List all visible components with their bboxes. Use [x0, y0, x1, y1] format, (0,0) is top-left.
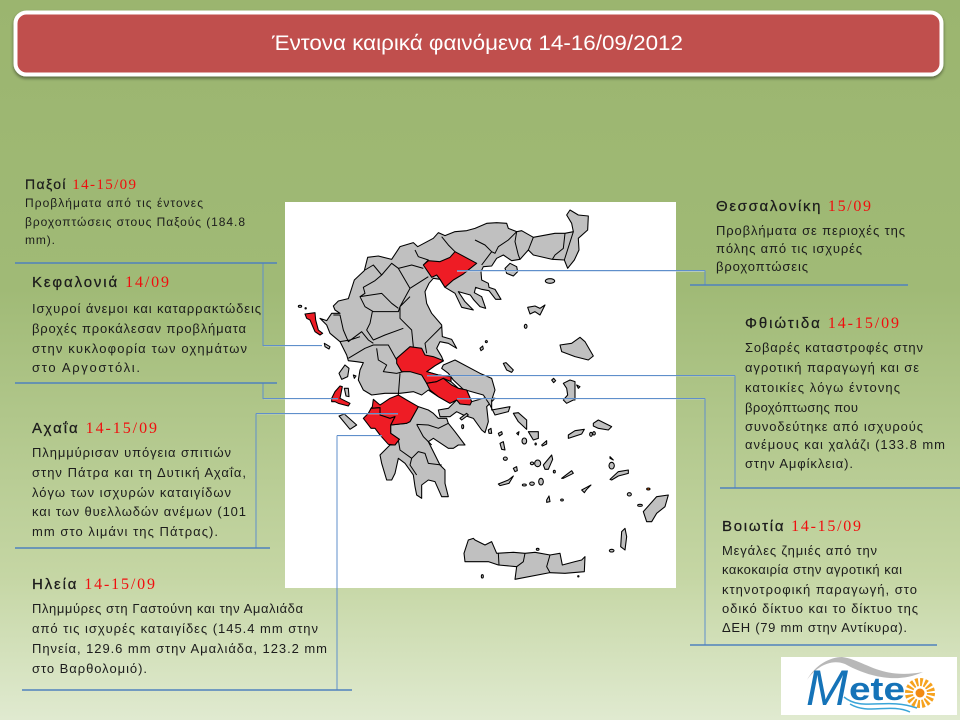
text: Ilia: Πηνεία, 129.6 mm στην Αμαλιάδα, 123.2 mm — [32, 641, 327, 656]
text: Fthiotida: ανέμους και χαλάζι (133.8 mm — [745, 437, 945, 452]
text: Ilia: από τις ισχυρές καταιγίδες (145.4 mm στην — [32, 621, 318, 636]
text: Fthiotida: βροχόπτωσης που — [745, 400, 858, 415]
logo: Meteo: ete — [849, 671, 905, 707]
connector lines — [15, 263, 960, 690]
panel: Ilia — [32, 576, 327, 676]
northern and central mainland — [320, 210, 588, 433]
region: Ilia — [363, 408, 399, 445]
text: Ilia: Πλημμύρες στη Γαστούνη και την Αμαλιάδα — [32, 601, 303, 616]
text: Achaia: και των θυελλωδών ανέμων (101 — [32, 504, 246, 519]
heading: Fthiotida: Φθιώτιδα 14-15/09 — [745, 315, 899, 332]
text: Achaia: Πλημμύρισαν υπόγεια σπιτιών — [32, 445, 231, 460]
text: Paxoi: Προβλήματα από τις έντονες — [25, 196, 203, 210]
icon: sun — [909, 682, 931, 704]
region: Thessaloniki — [423, 252, 477, 287]
text: Fthiotida: αγροτική παραγωγή και σε — [745, 360, 919, 375]
Crete — [464, 538, 585, 579]
region: Paxoi — [305, 313, 323, 335]
text: Voiotia: ΔΕΗ (79 mm στην Αντίκυρα). — [722, 620, 907, 635]
text: Thessaloniki: πόλης από τις ισχυρές — [716, 241, 862, 256]
text: Fthiotida: στην Αμφίκλεια). — [745, 456, 853, 471]
panel: Thessaloniki — [716, 198, 905, 274]
Peloponnese — [380, 407, 465, 498]
heading: Kefalonia: Κεφαλονιά 14/09 — [32, 274, 169, 291]
text: Voiotia — [722, 543, 918, 635]
text: Voiotia: οδικό δίκτυο και το δίκτυο της — [722, 601, 918, 616]
region: Achaia — [371, 395, 418, 425]
text: Thessaloniki: Προβλήματα σε περιοχές της — [716, 223, 905, 238]
text: Thessaloniki: βροχοπτώσεις — [716, 259, 808, 274]
text: Achaia — [32, 445, 246, 539]
logo: Meteo — [781, 657, 957, 716]
regional borders — [333, 232, 573, 395]
title banner — [16, 12, 942, 74]
panel: Fthiotida — [745, 315, 945, 471]
panel: Paxoi — [25, 176, 245, 247]
text: Thessaloniki — [716, 223, 905, 274]
heading: Thessaloniki: Θεσσαλονίκη 15/09 — [716, 198, 871, 215]
text: Achaia: στην Πάτρα και τη Δυτική Αχαΐα, — [32, 465, 246, 480]
text: Kefalonia: στο Αργοστόλι. — [32, 360, 140, 375]
heading: Achaia: Αχαΐα 14-15/09 — [32, 420, 157, 437]
text: Kefalonia — [32, 301, 261, 375]
Aegean islands — [505, 263, 518, 276]
panel: Voiotia — [722, 518, 918, 635]
panel: Kefalonia — [32, 274, 261, 375]
text: Paxoi: βροχοπτώσεις στους Παξούς (184.8 — [25, 215, 245, 229]
text: Ilia — [32, 601, 327, 676]
text: Voiotia: κτηνοτροφική παραγωγή, στο — [722, 582, 917, 597]
heading: Paxoi: Παξοί 14-15/09 — [25, 176, 136, 193]
text: Fthiotida: κατοικίες λόγω έντονης — [745, 380, 900, 395]
text: Voiotia: Μεγάλες ζημιές από την — [722, 543, 877, 558]
Evia — [442, 360, 510, 415]
text: Fthiotida — [745, 340, 945, 471]
text: Achaia: λόγω των ισχυρών καταιγίδων — [32, 485, 231, 500]
panel: Achaia — [32, 420, 246, 539]
text: Ilia: στο Βαρθολομιό). — [32, 661, 147, 676]
text: Paxoi: mm). — [25, 233, 55, 247]
region: Fthiotida — [397, 347, 451, 383]
text: Paxoi — [25, 196, 245, 247]
heading: Voiotia: Βοιωτία 14-15/09 — [722, 518, 861, 535]
region: Voiotia — [427, 378, 472, 405]
Ionian islands — [339, 365, 349, 379]
text: Kefalonia: βροχές προκάλεσαν προβλήματα — [32, 321, 246, 336]
text: Fthiotida: συνοδεύτηκε από ισχυρούς — [745, 419, 923, 434]
title: Έντονα καιρικά φαινόμενα 14-16/09/2012 — [271, 32, 683, 55]
text: Fthiotida: Σοβαρές καταστροφές στην — [745, 340, 923, 355]
logo: Meteo: M — [806, 660, 848, 716]
map of Greece — [285, 202, 676, 588]
text: Achaia: mm στο λιμάνι της Πάτρας). — [32, 524, 218, 539]
text: Kefalonia: στην κυκλοφορία των οχημάτων — [32, 341, 247, 356]
text: Voiotia: κακοκαιρία στην αγροτική και — [722, 562, 902, 577]
region: Kefalonia — [332, 386, 350, 406]
text: Kefalonia: Ισχυροί άνεμοι και καταρρακτώδεις — [32, 301, 261, 316]
heading: Ilia: Ηλεία 14-15/09 — [32, 576, 155, 593]
